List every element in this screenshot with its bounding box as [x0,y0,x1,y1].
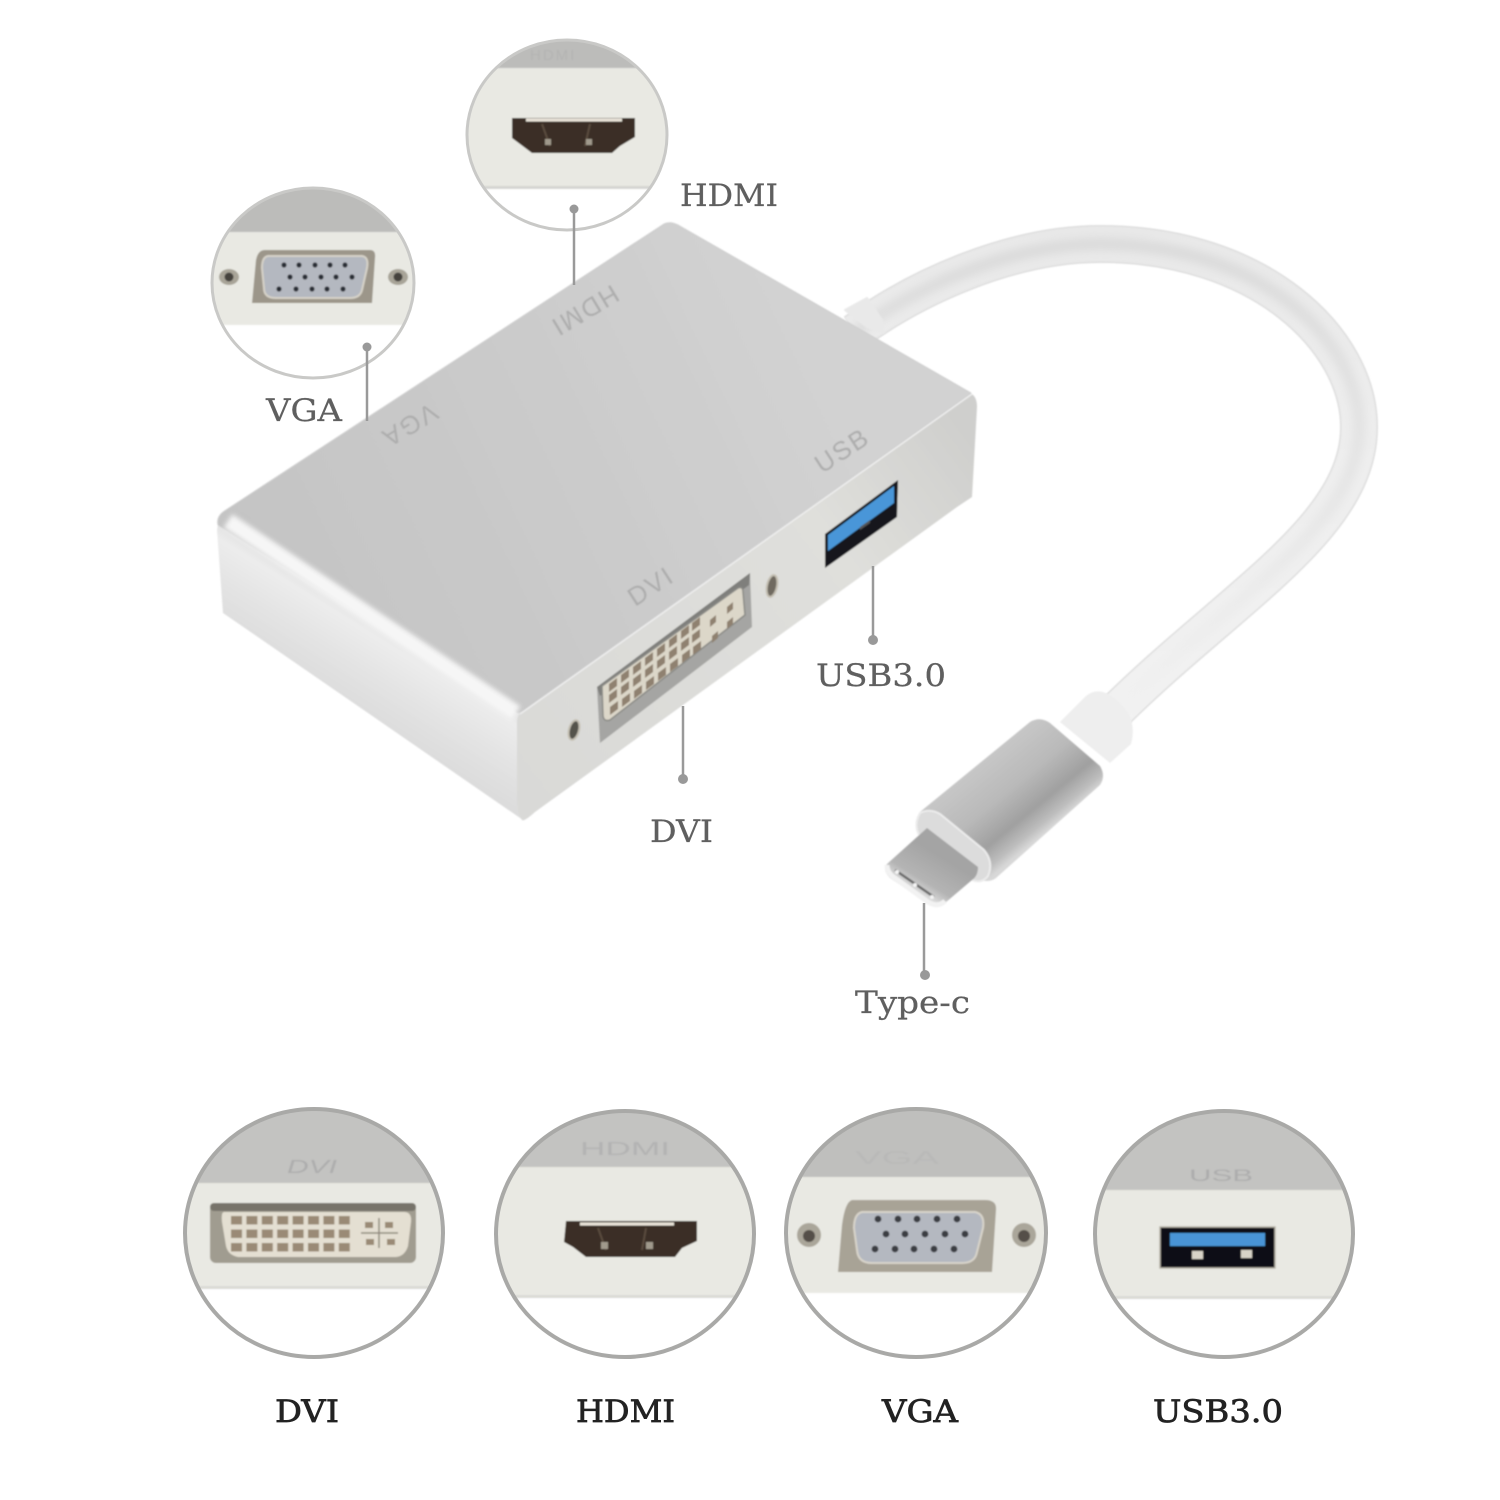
bottom label: USB3.0: USB3.0 [1153,1394,1283,1430]
leader line: DVI [678,706,688,784]
edge highlight ridge [228,521,516,713]
bottom circle: DVI: DVI [287,1157,337,1177]
leader line: VGA [362,342,372,421]
plug tip [885,828,978,906]
bottom circle: DVI [180,1105,450,1360]
bottom circle: HDMI [490,1105,760,1360]
callout circle: VGA [205,185,420,383]
bottom circle: USB3.0 [1090,1105,1360,1360]
screw right of DVI [765,574,779,598]
DVI port [597,573,752,743]
USB-C plug [885,719,1103,906]
bottom circle: USB3.0: USB [1189,1166,1253,1185]
bottom circle: VGA [780,1105,1050,1360]
screw left of DVI [567,719,581,741]
engraved DVI: DVI [622,560,680,612]
plug metal housing [916,719,1103,881]
cable strain relief at device [845,298,884,333]
bottom label: DVI: DVI [275,1394,339,1430]
cable [845,244,1359,763]
leader line: HDMI [570,204,578,285]
bottom circle: VGA: VGA [855,1148,939,1168]
label: DVI: DVI [650,814,713,850]
label: USB3.0: USB3.0 [816,658,946,694]
top face [218,223,971,713]
leader line: Type-c [920,903,930,980]
engraved HDMI: HDMI [545,279,624,343]
label: VGA: VGA [265,393,343,429]
label: Type-c: Type-c [855,985,970,1021]
label: HDMI: HDMI [680,178,778,214]
adapter body [217,223,977,820]
front face [517,393,977,820]
callout circle: HDMI [460,35,675,235]
callout circle: HDMI: HDMI [530,47,576,64]
engraved USB: USB [809,421,875,479]
leader line: USB3.0 [868,566,878,645]
bottom circle: HDMI: HDMI [580,1139,670,1159]
infographic canvas [183,38,1378,1423]
engraved VGA: VGA [376,397,443,454]
bottom label: VGA: VGA [881,1394,959,1430]
front edge seam [520,394,972,714]
cable strain relief at plug [1060,691,1133,763]
USB port [825,480,898,568]
bottom label: HDMI: HDMI [576,1394,675,1430]
left side face [217,516,530,820]
plug collar ring [916,811,990,881]
